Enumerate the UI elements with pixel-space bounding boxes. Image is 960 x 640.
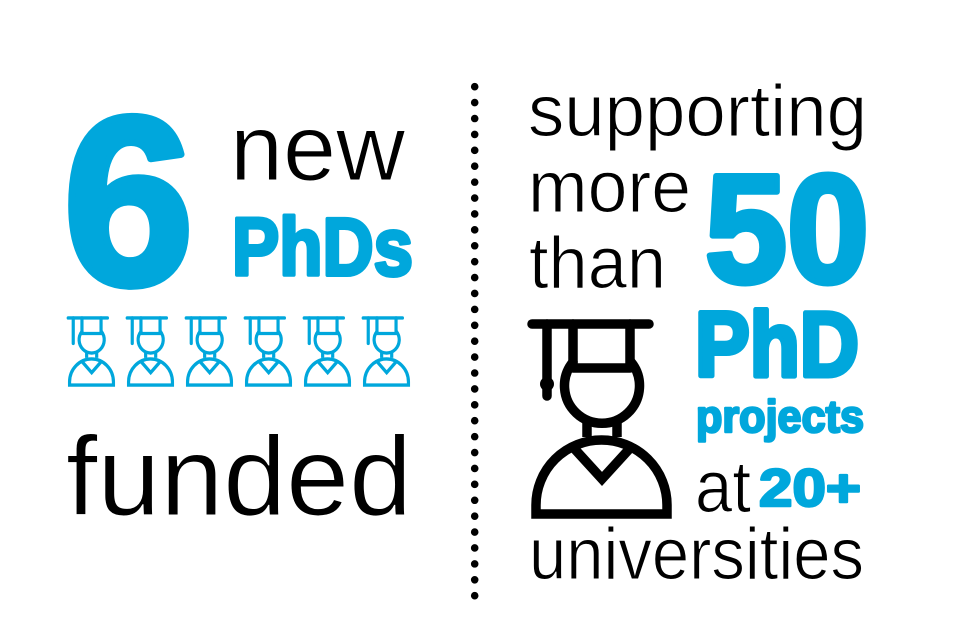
text: funded: funded [66,414,412,539]
text: than: than [529,223,666,304]
text: new: new [230,95,406,200]
icon row: six graduates [68,318,408,385]
big number 6: 6 [63,67,194,335]
icon detail: tassel knob [540,377,554,391]
text: supporting: supporting [528,71,867,152]
icon: graduate 2 [127,318,172,385]
dotted divider [471,87,479,596]
text: at: at [695,447,751,528]
icon: graduate 1 [68,318,113,385]
text: PhDs: PhDs [232,202,413,293]
icon: graduate 6 [363,318,408,385]
text: 20+: 20+ [759,459,861,518]
icon: graduate 5 [304,318,349,385]
text: more: more [528,147,691,228]
text: projects: projects [696,391,864,442]
icon: graduate 3 [186,318,231,385]
icon: graduate 4 [245,318,290,385]
big number 50: 50 [705,143,869,315]
text: PhD: PhD [695,294,859,396]
text: universities: universities [529,514,864,595]
icon: large graduate [532,324,667,514]
